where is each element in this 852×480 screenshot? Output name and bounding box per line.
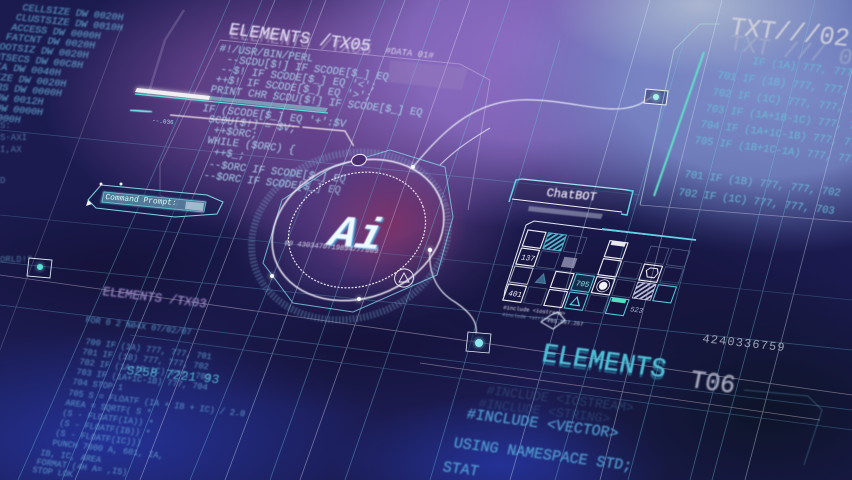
ring joint [350, 153, 368, 167]
text: bottom left code listing: AREA = SQRTF( S * [64, 398, 152, 418]
text: perl code listing: --SCDU[$!] IF SCODE[$_] EQ [225, 54, 390, 84]
grid accent [602, 229, 696, 240]
text: perl code listing: PRINT CHR SCDU[$!] IF SCODE[$_] EQ [209, 84, 424, 119]
label: #DATA 01: #DATA 01# [384, 45, 436, 61]
text: perl code listing: --$! IF SCODE[$_] EQ '<'; [219, 64, 378, 93]
panel: tinted header bar [388, 60, 468, 90]
code listing: top left memory table: CELLSIZE DW 0020H [21, 3, 124, 25]
heading: ELEMENTS /TX05: ELEMENTS /TX05 [228, 25, 374, 61]
text: bottom left code listing: (S - FLOATF(IA)) * [61, 408, 154, 429]
label: Ai: Ai [320, 209, 389, 263]
code fragments: left margin: S-AXI [0, 133, 27, 143]
text: perl code listing: ++$! IF SCODE[$_] EQ '>'; [214, 74, 373, 103]
text: bottom code listing: #INCLUDE <VECTOR> [465, 405, 620, 443]
ring dots [270, 165, 432, 301]
cyan and hatched cells [523, 233, 690, 321]
panel: bottom right frame [744, 390, 822, 465]
text: perl code listing: SCDU[$!] = $V; [207, 114, 297, 136]
code fragments: left margin: I,AX [0, 145, 22, 155]
heading: ELEMENTS T06 [539, 339, 738, 401]
text: bottom left code listing: 702 IF (1A+1B-1C) 777, 703 [78, 357, 212, 383]
text: bottom left code listing: 703 IF (1A+1C-1B) 777, 704 [75, 367, 209, 393]
text: bottom left code listing: 704 STOP 1 [71, 377, 124, 393]
command prompt box [86, 182, 223, 217]
command prompt box: Command Prompt: [104, 193, 177, 208]
text: bottom left code listing: STOP LOK [31, 465, 75, 480]
chatbot label box: ChatBOT [545, 186, 598, 205]
code listing: top left memory table [0, 0, 126, 135]
text: perl code listing: WHILE ($ORC) { [206, 135, 296, 157]
text: bottom code listing: #INCLUDE <STRING> [477, 396, 612, 427]
heading: ELEMENTS /TX05: ELEMENTS /TX05 [227, 21, 373, 57]
icon: left node [27, 258, 52, 278]
connector: curve to top right node [413, 97, 652, 167]
text: bottom code listing: #INCLUDE <IOSTREAM> [485, 383, 635, 416]
text: right code listing: 701 IF (1B) 777, 777, 702 [683, 169, 842, 200]
grid glyphs: 401 [507, 291, 523, 300]
heading: ELEMENTS T06: ELEMENTS [539, 342, 668, 388]
small include text and marker: #include <string> [502, 312, 553, 323]
text: bottom left code listing: PUNCH 7000 A, 601, IA, [51, 438, 164, 461]
small include text and marker: 705.987.267 [547, 317, 584, 328]
text: bottom left code listing: FOR 0 2 %04X 07/02/07 [84, 315, 192, 338]
grid glyphs: 523 [629, 306, 644, 316]
code fragments: left margin: ORLD!" [0, 255, 32, 265]
number: 8258 7221 99: S258 7221 93 [125, 363, 221, 387]
grid glyphs: 137 [520, 255, 536, 264]
code fragments: left margin: S: [0, 121, 11, 131]
text: right code listing [677, 56, 852, 218]
symbol grid [503, 230, 690, 321]
panel: right code column frame [640, 24, 720, 205]
small include text and marker [502, 304, 584, 329]
text: right code listing: 702 IF (1C) 777, 777, 703 [677, 187, 836, 218]
connector: curve to bottom node [430, 250, 476, 334]
connector: long line to ring [170, 115, 360, 157]
text: bottom left code listing: IB, IC, AREA [39, 448, 103, 465]
text: perl code listing: --$ORC IF SCODE[$_] EQ [207, 159, 347, 186]
code listing: top left memory table: CLUSTSIZE DW 0010H [14, 13, 124, 35]
text: bottom left code listing: FORMAT (4H A= ,I5) [35, 457, 128, 478]
text: bottom left code listing: (S - FLOATF(IC))) [54, 428, 142, 448]
text: perl code listing: #!/USR/BIN/PERL [218, 43, 314, 65]
text: perl code listing: ++$ORC; [212, 125, 259, 142]
grid glyphs: 705 [574, 280, 591, 290]
chatbot label box [509, 179, 634, 219]
AI ring gauge [230, 127, 470, 345]
text: bottom code listing: STAT [441, 458, 480, 480]
code listing: top left memory table: ACCESS DW 0000H [10, 23, 102, 43]
white cells [503, 230, 669, 318]
heading: ELEMENTS /TX03: ELEMENTS /TX03 [101, 285, 208, 312]
icon: ring triangle badge [392, 266, 416, 290]
number string: 00 4303470719894///009 [283, 240, 379, 256]
heading: ELEMENTS T06: ELEMENTS [539, 339, 669, 385]
text: perl code listing: --$ORC IF SCODE[$_] EQ [202, 170, 342, 197]
icon: bottom node [466, 332, 491, 353]
text: perl code listing: ++$_; [212, 147, 246, 162]
number: 4240336759: 4240336759 [701, 332, 787, 355]
grid glyphs [507, 255, 657, 316]
label: Ai: Ai [322, 210, 391, 264]
text: bottom code listing [441, 383, 635, 480]
text: bottom left code listing: (S - FLOATF(IB)) * [58, 418, 151, 439]
dim cells [523, 233, 690, 321]
text: bottom left code listing: 705 S = FLOATF (IA + IB + IC) / 2.0 [67, 388, 246, 419]
code fragments: left margin [0, 121, 32, 265]
text: perl code listing [201, 43, 424, 197]
panel: top centre frame [148, 10, 490, 210]
code fragments: left margin: D [0, 176, 5, 186]
text: bottom code listing: USING NAMESPACE STD; [452, 434, 634, 475]
heading: ELEMENTS T06: T06 [687, 366, 738, 401]
icon: top right node [644, 89, 668, 105]
grid panel outline [504, 221, 696, 296]
text: perl code listing: IF (SCODE[$_] EQ '+':$V [201, 103, 348, 131]
progress bars: --.036 [152, 117, 174, 126]
text: bottom left code listing [31, 315, 246, 480]
heading: TXT ///02: TXT///02 [727, 13, 852, 54]
text: bottom left code listing: 700 IF (1A) 777, 777, 701 [84, 337, 212, 362]
small include text and marker: #include <iostream> [503, 304, 566, 317]
text: bottom left code listing: 701 IF (1B) 777, 777, 702 [81, 347, 209, 372]
progress bars [130, 88, 328, 126]
code listing: top left memory table: FATCNT DW 0020H [4, 33, 96, 52]
